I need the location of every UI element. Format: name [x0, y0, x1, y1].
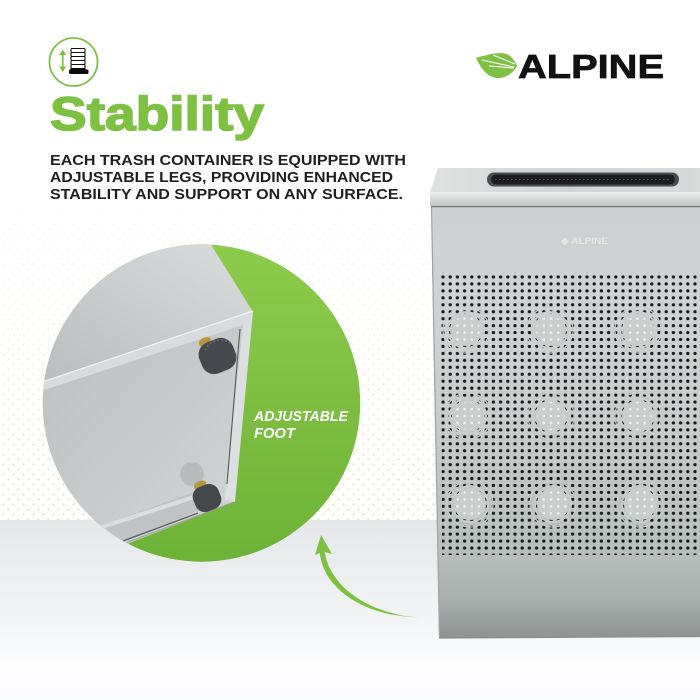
- dotted background pattern: [2, 214, 435, 520]
- title: Stability: [50, 87, 264, 140]
- panel: zoomed adjustable foot circle: [30, 240, 360, 562]
- bottom edge: [439, 636, 700, 638]
- callout label: adjustable foot: [253, 408, 349, 442]
- container body: [431, 207, 700, 638]
- photo: perforated trash container: [430, 168, 700, 638]
- arrow: pointing to foot: [315, 535, 423, 618]
- floor gradient: [0, 520, 700, 700]
- lid shadow line: [431, 206, 700, 207]
- callout label: adjustable foot: FOOT: [254, 425, 297, 442]
- icon: adjustable foot badge: [50, 38, 98, 86]
- green circle: [43, 244, 360, 562]
- moire rosettes: [442, 306, 664, 528]
- container lid top: [430, 168, 700, 192]
- description text: [50, 152, 406, 203]
- container opening: [487, 172, 679, 186]
- logo wordmark: ALPINE: [518, 48, 664, 85]
- logo: Alpine: [476, 48, 664, 85]
- description text: STABILITY AND SUPPORT ON ANY SURFACE.: [50, 186, 403, 203]
- description text: ADJUSTABLE LEGS, PROVIDING ENHANCED: [50, 169, 393, 186]
- adjustable foot: top knob: [198, 337, 236, 374]
- container lid front: [430, 192, 700, 206]
- perforation dots: [439, 274, 700, 555]
- icon: leaf: [476, 53, 517, 78]
- photo: underside of bin: [30, 240, 253, 544]
- callout label: adjustable foot: ADJUSTABLE: [253, 408, 349, 425]
- description text: EACH TRASH CONTAINER IS EQUIPPED WITH: [50, 152, 406, 169]
- adjustable foot: bottom knob: [180, 462, 222, 512]
- container logo: ◆ ALPINE: [560, 236, 608, 247]
- left edge highlight: [432, 207, 440, 638]
